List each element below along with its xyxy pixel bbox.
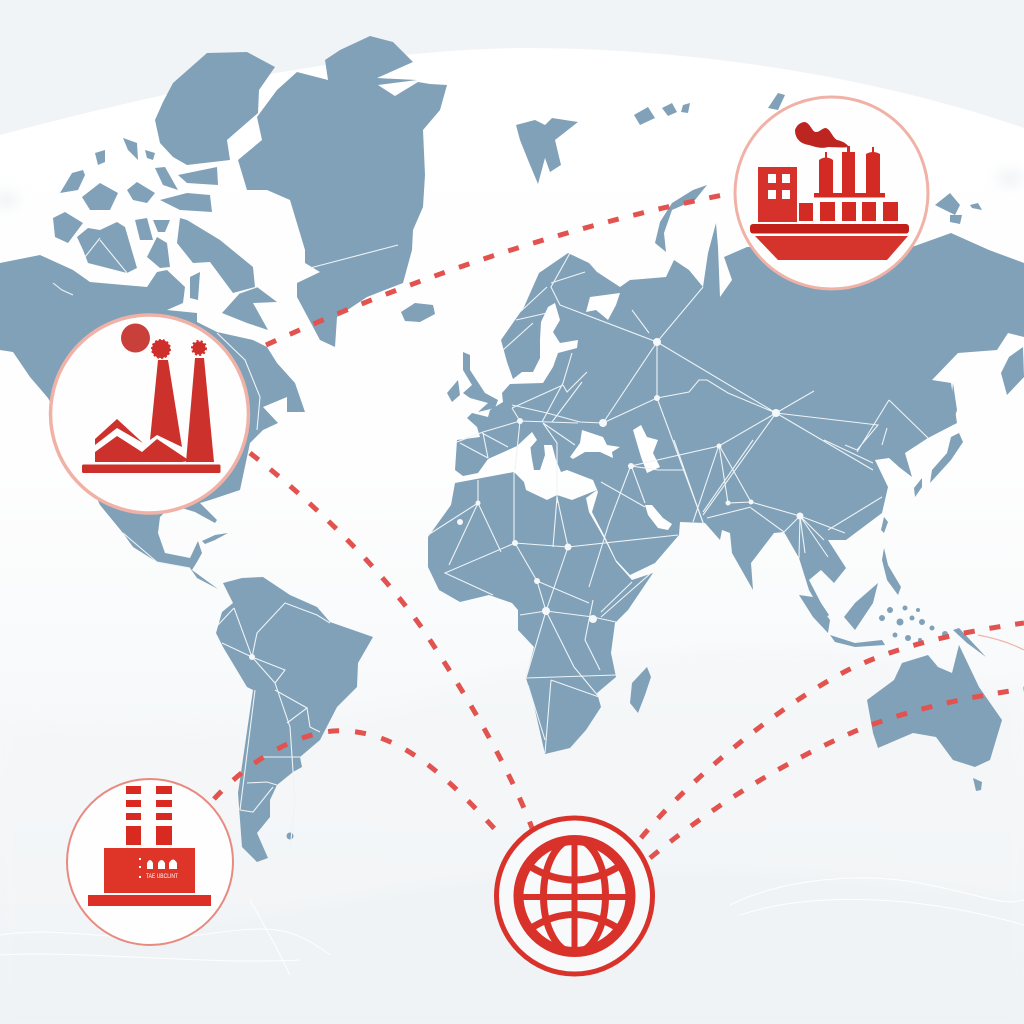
dashed route: globe hub to Pacific upper [641, 623, 1024, 838]
icon: ship factory circle [735, 97, 928, 289]
icon: factory circle with sun and smokestacks [50, 315, 248, 513]
icon: power plant circle: TAE UBCLINT [146, 874, 178, 880]
map network lines [53, 238, 928, 850]
landmass: Baffin Island [177, 218, 255, 293]
landmass: South America [216, 577, 373, 862]
icon: power plant circle [67, 779, 233, 945]
landmass: Iceland [401, 303, 435, 322]
landmass: Africa [428, 472, 653, 754]
dashed route: globe hub to Pacific lower [650, 689, 1024, 858]
landmass: Arctic archipelagos [634, 93, 982, 224]
landmass: Greenland [238, 36, 447, 347]
landmass: Southeast Asia islands [799, 517, 986, 657]
dashed route: South America to globe hub [214, 731, 503, 838]
landmass: Kamchatka and Sakhalin [1001, 347, 1024, 395]
landmass: Britain and Ireland [463, 352, 498, 412]
thin route accent [978, 635, 1024, 650]
landmass: Novaya Zemlya [655, 185, 707, 252]
landmass: Madagascar [630, 667, 651, 713]
map network nodes [249, 338, 804, 660]
landmass: Ellesmere Island [155, 52, 275, 165]
landmass: Arctic islands [53, 138, 218, 300]
landmass: Eurasia [455, 223, 1024, 618]
landmass: Quebec and Labrador [222, 287, 277, 330]
background ice cracks [0, 878, 1024, 975]
landmass: North America [0, 255, 305, 589]
landmass: Tasmania [973, 778, 982, 791]
sea overlays: White Sea, Black Sea, Caspian, Persian Gulf, Tyrrhenian [518, 293, 672, 530]
landmass: Australia [867, 645, 1002, 767]
icon: globe hub circle [496, 818, 652, 974]
landmass: Falkland dot [286, 832, 294, 840]
landmass: Svalbard [516, 118, 578, 184]
dashed route: North America to globe hub [250, 453, 532, 828]
dashed route: North America to Arctic plant [266, 192, 738, 345]
landmass: Japan [930, 433, 963, 483]
landmass: Cuba [202, 533, 228, 544]
